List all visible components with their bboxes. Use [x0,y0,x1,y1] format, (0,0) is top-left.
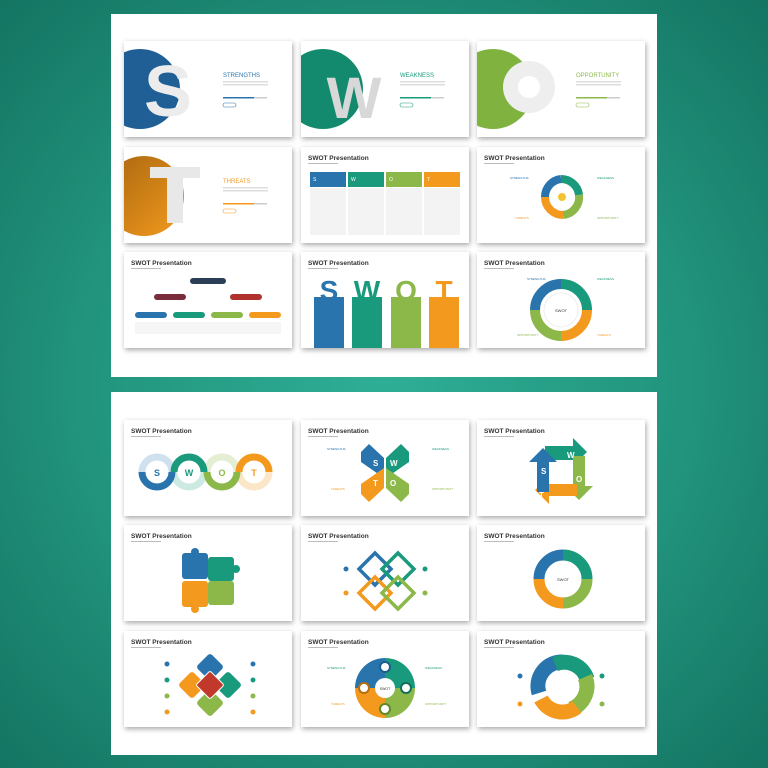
slide: opportunity [477,41,645,137]
slide: cycle arrows: S [541,467,547,476]
slide: diamond grid [124,631,292,727]
slide: cycle arrows: O [576,475,582,484]
slide: strengths [124,41,292,137]
slide: SWOT ring: THREATS [597,333,611,337]
slide: swot table: O [389,177,393,183]
slide: bulb cycle: OPPORTUNITY [597,216,619,220]
slide: bulb cycle: WEAKNESS [597,176,614,180]
slide: swirl ring: STRENGTHS [327,666,346,670]
slide: puzzle: SWOT Presentation [131,533,192,540]
slide: donut: SWOT Presentation [484,639,545,646]
slide: strengths: STRENGTHS [223,73,260,79]
slide: weakness [301,41,469,137]
slide: swirl ring: WEAKNESS [425,666,442,670]
slide: strengths: S [144,52,192,132]
slide: cross arrows: OPPORTUNITY [432,487,454,491]
slide: SWOT ring [477,252,645,348]
slide: swot table: S [313,177,317,183]
slide: swirl ring [301,631,469,727]
slide: SWOT letters bars: S [320,275,338,306]
slide: swot table: W [351,177,356,183]
slide: weakness: WEAKNESS [400,73,434,79]
slide: SWOT letters bars: O [395,275,417,306]
panel: bottom sheet [111,392,657,755]
slide: SWOT cycle: SWOT Presentation [484,533,545,540]
slide: diamonds [301,525,469,621]
slide: cross arrows: S [373,459,379,468]
panel: top sheet [111,14,657,377]
slide: opportunity: OPPORTUNITY [576,73,619,79]
slide: swirl ring: THREATS [331,702,345,706]
slide: SWOT ring: SWOT [555,308,568,313]
slide: cross arrows: W [390,459,398,468]
slide: swot table: SWOT Presentation [308,155,369,162]
slide: cross arrows: THREATS [331,487,345,491]
slide: cross arrows: STRENGTHS [327,447,346,451]
slide: donut [477,631,645,727]
slide: SWOT letters bars: T [435,275,453,306]
slide: weakness: W [327,66,382,131]
slide: wave SWOT [124,420,292,516]
slide: bulb cycle: THREATS [515,216,529,220]
slide: org chart [124,252,292,348]
slide: diamonds: SWOT Presentation [308,533,369,540]
slide: SWOT ring: SWOT Presentation [484,260,545,267]
slide: SWOT letters bars: SWOT Presentation [308,260,369,267]
slide: cycle arrows: T [539,491,544,500]
slide: org chart: SWOT Presentation [131,260,192,267]
slide: SWOT letters bars: W [354,275,381,306]
slide: cross arrows: SWOT Presentation [308,428,369,435]
slide: bulb cycle: STRENGTHS [510,176,529,180]
slide: swot table [301,147,469,243]
slide: SWOT letters bars [301,252,469,348]
slide: cross arrows: O [390,479,396,488]
slide: threats [124,147,292,243]
slide: wave SWOT: W [185,468,194,478]
slide: swirl ring: SWOT Presentation [308,639,369,646]
slide: SWOT ring: WEAKNESS [597,277,614,281]
slide: wave SWOT: SWOT Presentation [131,428,192,435]
slide: diamond grid: SWOT Presentation [131,639,192,646]
slide: swirl ring: SWOT [380,687,391,691]
slide: threats: THREATS [223,179,251,185]
slide: cross arrows [301,420,469,516]
slide: cycle arrows: SWOT Presentation [484,428,545,435]
slide: swirl ring: OPPORTUNITY [425,702,447,706]
slide: bulb cycle: SWOT Presentation [484,155,545,162]
slide: bulb cycle [477,147,645,243]
slide: SWOT ring: OPPORTUNITY [517,333,539,337]
slide: cross arrows: WEAKNESS [432,447,449,451]
slide: wave SWOT: O [218,468,226,478]
slide: cycle arrows: W [567,451,575,460]
slide: SWOT cycle: SWOT [557,577,570,582]
slide: cycle arrows [477,420,645,516]
slide: SWOT cycle [477,525,645,621]
slide: cross arrows: T [373,479,378,488]
slide: puzzle [124,525,292,621]
slide: SWOT ring: STRENGTHS [527,277,546,281]
slide: wave SWOT: S [154,468,160,478]
slide: wave SWOT: T [251,468,257,478]
slide: swot table: T [427,177,430,183]
